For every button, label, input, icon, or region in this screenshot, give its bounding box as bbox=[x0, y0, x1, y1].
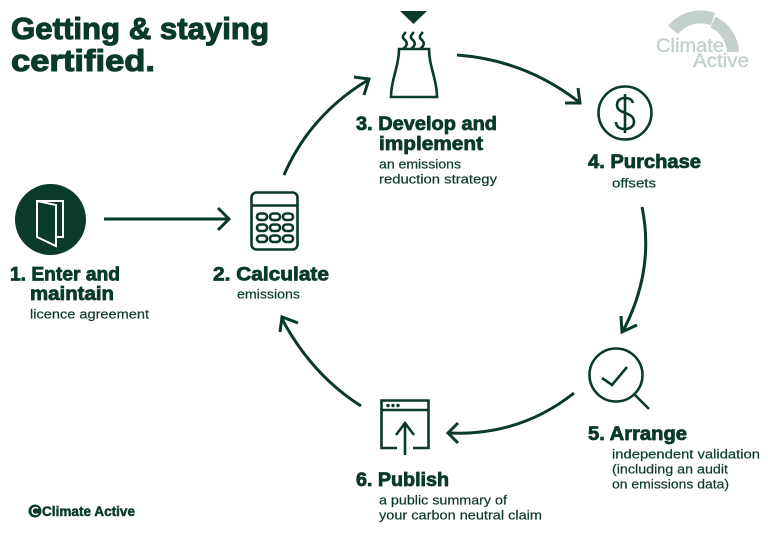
logo: Climate Active watermark bbox=[656, 17, 749, 72]
heading: step 4: 4. Purchase bbox=[588, 151, 701, 173]
text: step 1 description: licence agreement bbox=[30, 306, 149, 322]
arrow: step 2 to step 3 bbox=[284, 77, 369, 175]
heading: step 3: implement bbox=[379, 133, 484, 155]
title: Getting & staying bbox=[11, 11, 269, 46]
heading: step 1 bbox=[10, 264, 120, 305]
arrow: step 1 to step 2 bbox=[104, 208, 229, 230]
arrow: step 3 to step 4 bbox=[457, 55, 580, 103]
footer logo: Climate Active: Climate Active bbox=[42, 504, 135, 519]
arrow: step 5 to step 6 bbox=[448, 393, 574, 443]
step 5: arrange bbox=[588, 348, 760, 492]
heading: step 2: 2. Calculate bbox=[213, 264, 329, 286]
icon: magnifier with tick bbox=[590, 348, 649, 409]
text: step 3 description bbox=[379, 156, 498, 186]
step 6: publish bbox=[356, 400, 542, 522]
text: step 6 description bbox=[379, 492, 542, 522]
icon: cooling tower with steam bbox=[391, 11, 437, 97]
text: step 2 description: emissions bbox=[237, 286, 301, 302]
text: step 6 description: a public summary of bbox=[379, 492, 507, 508]
step 1: enter and maintain bbox=[10, 184, 149, 322]
text: step 4 description: offsets bbox=[612, 176, 657, 190]
heading: step 3 bbox=[356, 113, 497, 155]
icon: dollar coin bbox=[598, 86, 652, 140]
text: step 5 description: on emissions data) bbox=[612, 476, 729, 492]
logo: Climate Active watermark: Climate bbox=[656, 36, 724, 57]
text: step 6 description: your carbon neutral claim bbox=[379, 508, 542, 522]
title bbox=[11, 11, 269, 78]
icon: browser window with upload arrow bbox=[382, 400, 428, 455]
title: certified. bbox=[11, 43, 155, 78]
text: step 3 description: an emissions bbox=[379, 156, 462, 172]
arrow: step 6 to step 2 bbox=[280, 317, 361, 406]
text: step 5 description: independent validation bbox=[612, 446, 760, 462]
heading: step 1: maintain bbox=[30, 283, 114, 305]
text: step 5 description bbox=[612, 446, 760, 492]
text: step 3 description: reduction strategy bbox=[379, 172, 498, 186]
icon: door in circle bbox=[15, 184, 86, 255]
text: step 5 description: (including an audit bbox=[612, 462, 728, 476]
heading: step 3: 3. Develop and bbox=[356, 113, 497, 135]
logo: Climate Active watermark: Active bbox=[693, 51, 749, 72]
heading: step 6: 6. Publish bbox=[356, 469, 449, 491]
icon: calculator bbox=[252, 192, 298, 250]
arrow: step 4 to step 5 bbox=[621, 207, 646, 332]
step 3: develop and implement bbox=[356, 11, 498, 186]
heading: step 5: 5. Arrange bbox=[588, 423, 687, 445]
step 4: purchase bbox=[588, 86, 701, 190]
step 2: calculate bbox=[213, 192, 329, 302]
heading: step 1: 1. Enter and bbox=[10, 264, 120, 286]
